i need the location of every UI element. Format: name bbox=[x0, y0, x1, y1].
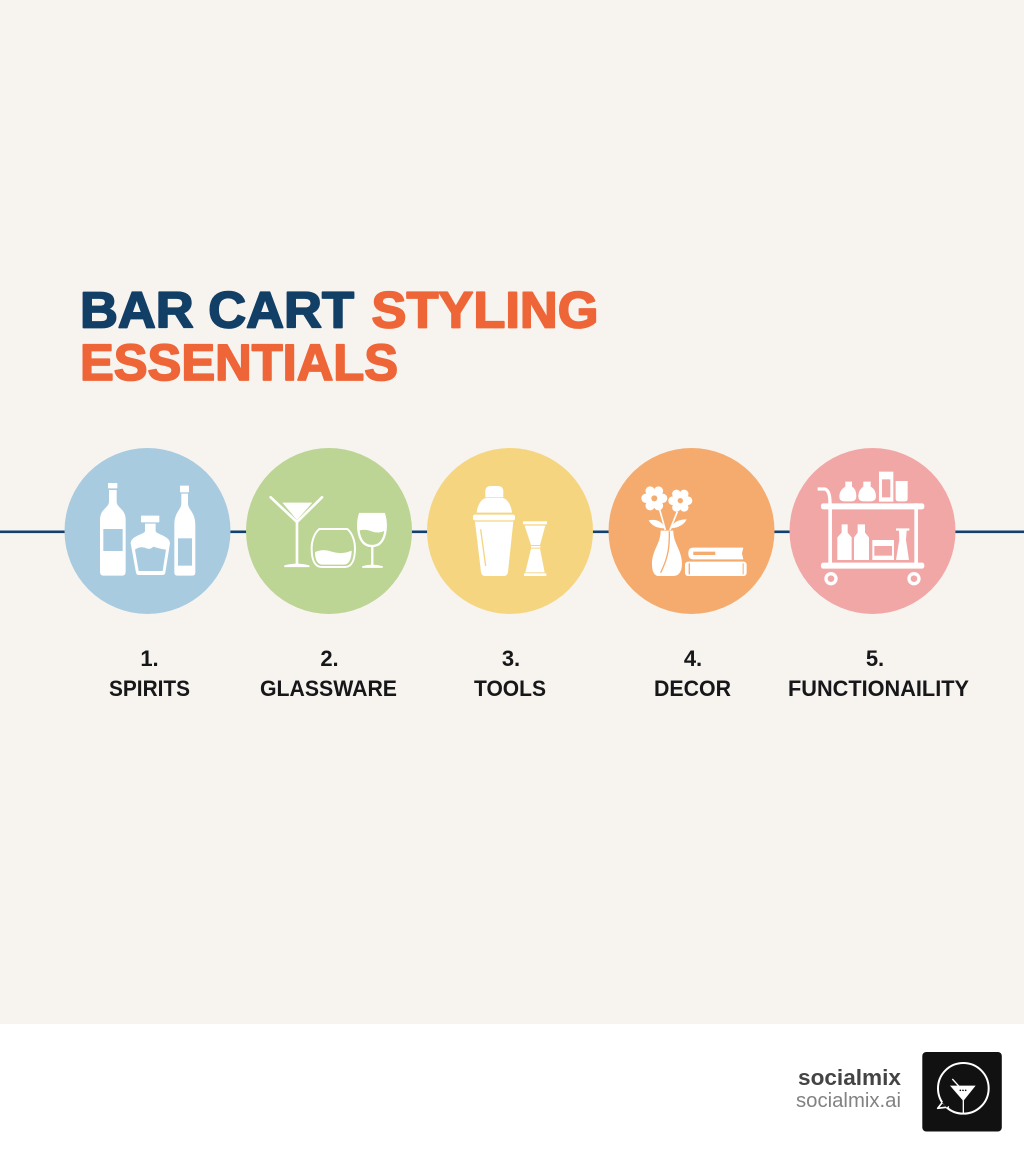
label 1: spirits: SPIRITS bbox=[109, 676, 190, 701]
icon: three glasses bbox=[271, 497, 386, 567]
label 5: functionaility: FUNCTIONAILITY bbox=[788, 676, 969, 701]
label 3: tools: TOOLS bbox=[474, 676, 546, 701]
label 4: decor: DECOR bbox=[654, 676, 731, 701]
label 2: glassware: GLASSWARE bbox=[260, 676, 397, 701]
brand text: socialmix.ai bbox=[796, 1090, 901, 1112]
icon: shaker and jigger bbox=[473, 486, 547, 576]
label 4: decor bbox=[654, 646, 731, 701]
label 4: decor: 4. bbox=[684, 646, 702, 671]
label 3: tools bbox=[474, 646, 546, 701]
label 5: functionaility: 5. bbox=[866, 646, 884, 671]
item 2: glassware bbox=[246, 448, 412, 614]
timeline line bbox=[0, 530, 1024, 533]
logo bbox=[922, 1052, 1002, 1132]
icon: three bottles bbox=[100, 483, 195, 576]
label 2: glassware: 2. bbox=[320, 646, 339, 671]
label 1: spirits: 1. bbox=[140, 646, 159, 671]
item 5: functionality bbox=[790, 448, 956, 614]
title: STYLING bbox=[372, 282, 598, 338]
label 3: tools: 3. bbox=[502, 646, 520, 671]
circle: glassware bbox=[246, 448, 412, 614]
item 4: decor bbox=[608, 448, 774, 614]
circle: functionality bbox=[790, 448, 956, 614]
title: ESSENTIALS bbox=[80, 334, 398, 391]
circle: tools bbox=[427, 448, 593, 614]
circle: decor bbox=[608, 448, 774, 614]
item 1: spirits bbox=[64, 448, 230, 614]
icon: bar cart bbox=[818, 472, 924, 584]
label 5: functionaility bbox=[788, 646, 969, 701]
item 3: tools bbox=[427, 448, 593, 614]
brand text bbox=[796, 1065, 902, 1112]
label 1: spirits bbox=[109, 646, 190, 701]
footer band bbox=[0, 1024, 1024, 1154]
label 2: glassware bbox=[260, 646, 397, 701]
title: BAR CART bbox=[80, 282, 354, 338]
title bbox=[80, 282, 598, 391]
brand text: socialmix bbox=[798, 1065, 902, 1090]
circle: spirits bbox=[64, 448, 230, 614]
icon: vase and books bbox=[641, 486, 747, 576]
